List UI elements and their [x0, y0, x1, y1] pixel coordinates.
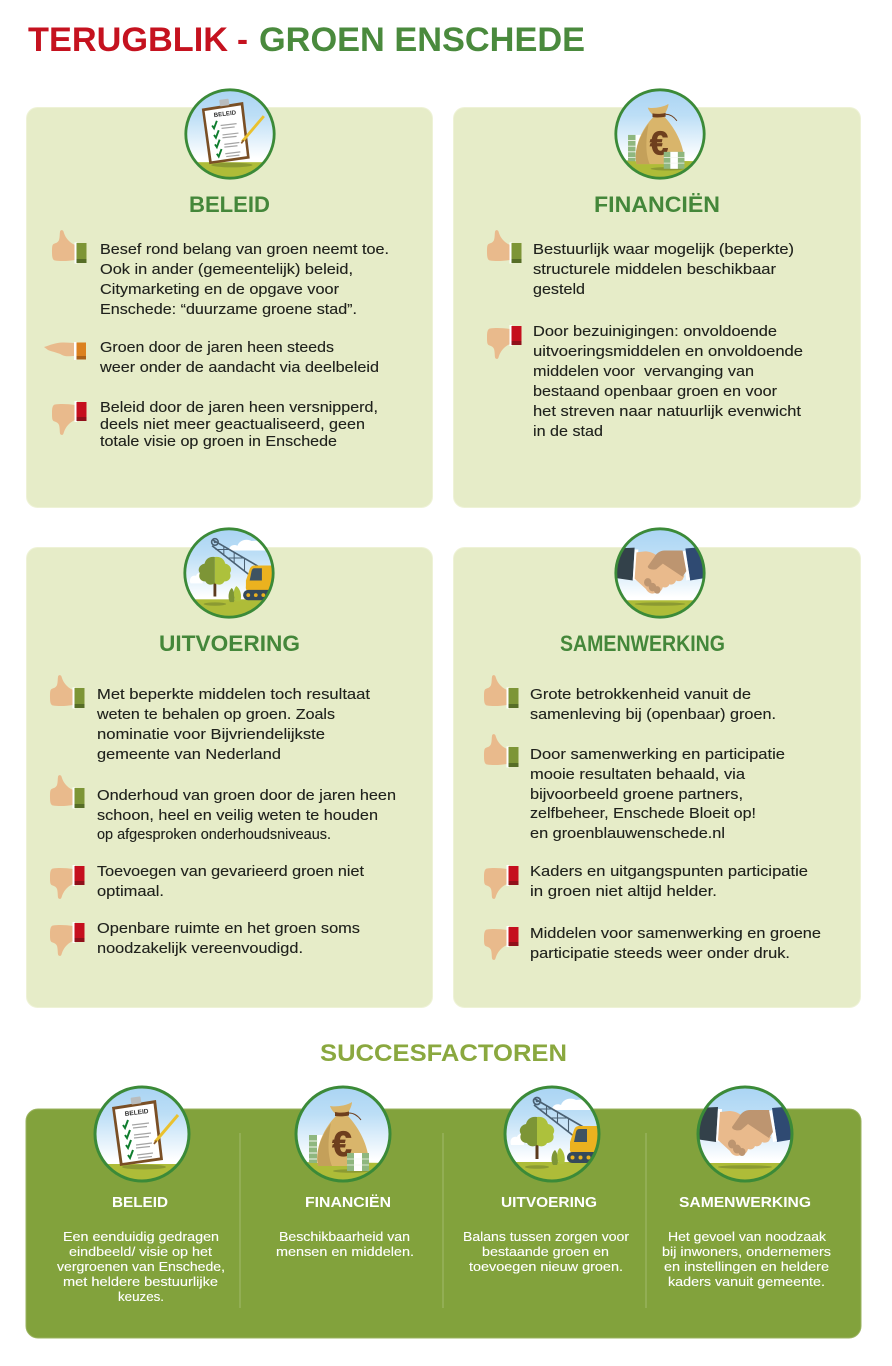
- text: besef: Citymarketing en de opgave voor: [100, 282, 339, 298]
- column: beleid: [57, 1084, 225, 1304]
- icon: thumb down: [50, 865, 84, 899]
- text: participatie: en groenblauwenschede.nl: [530, 826, 725, 842]
- text: toevoegen: [97, 864, 364, 900]
- text: kaders: in groen niet altijd helder.: [530, 884, 717, 900]
- text: versnipperd: deels niet meer geactualiseerd, geen: [100, 417, 365, 433]
- icon: clipboard: [92, 1084, 192, 1184]
- icon: thumb up: [50, 775, 84, 808]
- text: besef: Ook in ander (gemeentelijk) beleid,: [100, 262, 353, 278]
- text: toevoegen: Toevoegen van gevarieerd groen niet: [97, 864, 364, 880]
- text: beleid factor: vergroenen van Enschede,: [57, 1259, 225, 1274]
- text: beperkte middelen: gemeente van Nederland: [97, 747, 281, 763]
- text: bezuinigingen: Door bezuinigingen: onvoldoende: [533, 324, 777, 340]
- column: samenwerking: [662, 1084, 832, 1289]
- text: kaders: Kaders en uitgangspunten participatie: [530, 864, 808, 880]
- text: kaders: [530, 864, 808, 900]
- text: uitvoering factor: bestaande groen en: [482, 1244, 609, 1259]
- title: [28, 21, 585, 59]
- text: participatie: Door samenwerking en participatie: [530, 747, 785, 763]
- column: financien: [276, 1084, 414, 1259]
- icon: handshake: [613, 526, 707, 620]
- text: beperkte middelen: weten te behalen op groen. Zoals: [96, 707, 335, 723]
- text: beperkte middelen: nominatie voor Bijvriendelijkste: [97, 727, 325, 743]
- panel: uitvoering: [26, 526, 432, 1008]
- title: TERUGBLIK: [28, 21, 228, 59]
- text: beleid factor: met heldere bestuurlijke: [63, 1274, 218, 1289]
- icon: thumb down: [487, 325, 522, 359]
- column: uitvoering: [463, 1084, 630, 1274]
- text: bezuinigingen: middelen voor vervanging van: [533, 364, 754, 380]
- icon: thumb up: [484, 734, 518, 768]
- text: samenwerking factor: kaders vanuit gemeente.: [668, 1274, 825, 1289]
- text: samenwerking factor: [662, 1229, 832, 1289]
- text: betrokkenheid: Grote betrokkenheid vanuit de: [530, 687, 751, 703]
- text: versnipperd: totale visie op groen in Enschede: [100, 434, 337, 450]
- text: bezuinigingen: uitvoeringsmiddelen en onvoldoende: [533, 344, 803, 360]
- subheading: beleid: BELEID: [112, 1195, 168, 1211]
- heading: financien: FINANCIËN: [594, 192, 720, 217]
- text: uitvoering factor: Balans tussen zorgen voor: [463, 1229, 630, 1244]
- icon: thumb down: [484, 926, 518, 960]
- panel: financien: [454, 87, 860, 508]
- icon: thumb up: [52, 230, 86, 264]
- text: beleid factor: keuzes.: [118, 1289, 164, 1304]
- text: beleid factor: eindbeeld/ visie op het: [69, 1244, 212, 1259]
- text: uitvoering factor: toevoegen nieuw groen.: [469, 1259, 623, 1274]
- text: beleid factor: [57, 1229, 225, 1304]
- text: betrokkenheid: samenleving bij (openbaar) groen.: [530, 707, 776, 723]
- text: groen door de jaren: [99, 340, 379, 376]
- text: openbare ruimte: noodzakelijk vereenvoudigd.: [97, 941, 303, 957]
- text: bezuinigingen: bestaand openbaar groen en voor: [533, 384, 777, 400]
- text: samenwerking factor: Het gevoel van noodzaak: [668, 1229, 827, 1244]
- text: middelen: [530, 926, 821, 962]
- text: beperkte middelen: Met beperkte middelen toch resultaat: [97, 687, 370, 703]
- text: openbare ruimte: [97, 921, 360, 957]
- text: middelen: Middelen voor samenwerking en groene: [530, 926, 821, 942]
- heading: samenwerking: SAMENWERKING: [560, 631, 725, 656]
- text: bestuurlijk: Bestuurlijk waar mogelijk (beperkte): [533, 242, 794, 258]
- title: GROEN ENSCHEDE: [259, 21, 585, 59]
- text: besef: Enschede: “duurzame groene stad”.: [100, 302, 357, 318]
- text: versnipperd: Beleid door de jaren heen versnipperd,: [100, 400, 378, 416]
- text: onderhoud: schoon, heel en veilig weten te houden: [97, 808, 378, 824]
- icon: thumb down: [484, 865, 518, 899]
- subheading: samenwerking: SAMENWERKING: [679, 1195, 811, 1211]
- text: financien factor: Beschikbaarheid van: [279, 1229, 410, 1244]
- subheading: financien: FINANCIËN: [305, 1194, 391, 1211]
- text: samenwerking factor: en instellingen en heldere: [664, 1259, 829, 1274]
- text: participatie: zelfbeheer, Enschede Bloeit op!: [530, 806, 756, 822]
- text: onderhoud: op afgesproken onderhoudsniveaus.: [97, 827, 331, 843]
- text: groen door de jaren: weer onder de aandacht via deelbeleid: [99, 360, 379, 376]
- text: uitvoering factor: [463, 1229, 630, 1274]
- icon: thumb up: [487, 230, 522, 264]
- text: participatie: [530, 747, 785, 842]
- text: versnipperd: [100, 400, 378, 450]
- text: financien factor: mensen en middelen.: [276, 1244, 414, 1259]
- text: toevoegen: optimaal.: [97, 884, 164, 900]
- text: middelen: participatie steeds weer onder druk.: [530, 946, 790, 962]
- text: samenwerking factor: bij inwoners, ondernemers: [662, 1244, 832, 1259]
- text: betrokkenheid: [530, 687, 776, 723]
- icon: crane and tree: [502, 1084, 602, 1184]
- text: groen door de jaren: Groen door de jaren heen steeds: [100, 340, 334, 356]
- text: onderhoud: Onderhoud van groen door de jaren heen: [97, 788, 396, 804]
- icon: clipboard: [183, 87, 277, 181]
- text: onderhoud: [97, 788, 396, 843]
- text: besef: Besef rond belang van groen neemt toe.: [100, 242, 389, 258]
- title: -: [237, 21, 248, 59]
- text: openbare ruimte: Openbare ruimte en het groen soms: [97, 921, 360, 937]
- text: participatie: bijvoorbeeld groene partners,: [530, 787, 743, 803]
- subheading: uitvoering: UITVOERING: [501, 1195, 597, 1211]
- text: besef: [100, 242, 389, 318]
- text: bezuinigingen: in de stad: [533, 424, 603, 440]
- icon: thumb down: [52, 401, 86, 435]
- icon: crane and tree: [182, 526, 276, 620]
- text: beperkte middelen: [96, 687, 370, 763]
- panel: succesfactoren: [26, 1084, 861, 1338]
- heading: succesfactoren: SUCCESFACTOREN: [320, 1040, 567, 1067]
- text: bestuurlijk: [533, 242, 794, 298]
- text: financien factor: [276, 1229, 414, 1259]
- panel: beleid: [26, 87, 432, 508]
- text: participatie: mooie resultaten behaald, via: [530, 767, 746, 783]
- icon: handshake: [695, 1084, 795, 1184]
- text: beleid factor: Een eenduidig gedragen: [63, 1229, 219, 1244]
- icon: money bag: [293, 1084, 393, 1184]
- icon: money bag: [613, 87, 707, 181]
- text: bestuurlijk: gesteld: [533, 282, 585, 298]
- heading: beleid: BELEID: [189, 192, 270, 217]
- icon: thumb up: [50, 675, 84, 708]
- icon: thumb down: [50, 922, 84, 956]
- text: bezuinigingen: [533, 324, 803, 440]
- icon: thumb up: [484, 675, 518, 708]
- icon: thumb sideways: [44, 342, 86, 360]
- text: bezuinigingen: het streven naar natuurlijk evenwicht: [533, 404, 801, 420]
- text: bestuurlijk: structurele middelen beschikbaar: [533, 262, 776, 278]
- panel: samenwerking: [454, 526, 860, 1008]
- heading: uitvoering: UITVOERING: [159, 631, 300, 656]
